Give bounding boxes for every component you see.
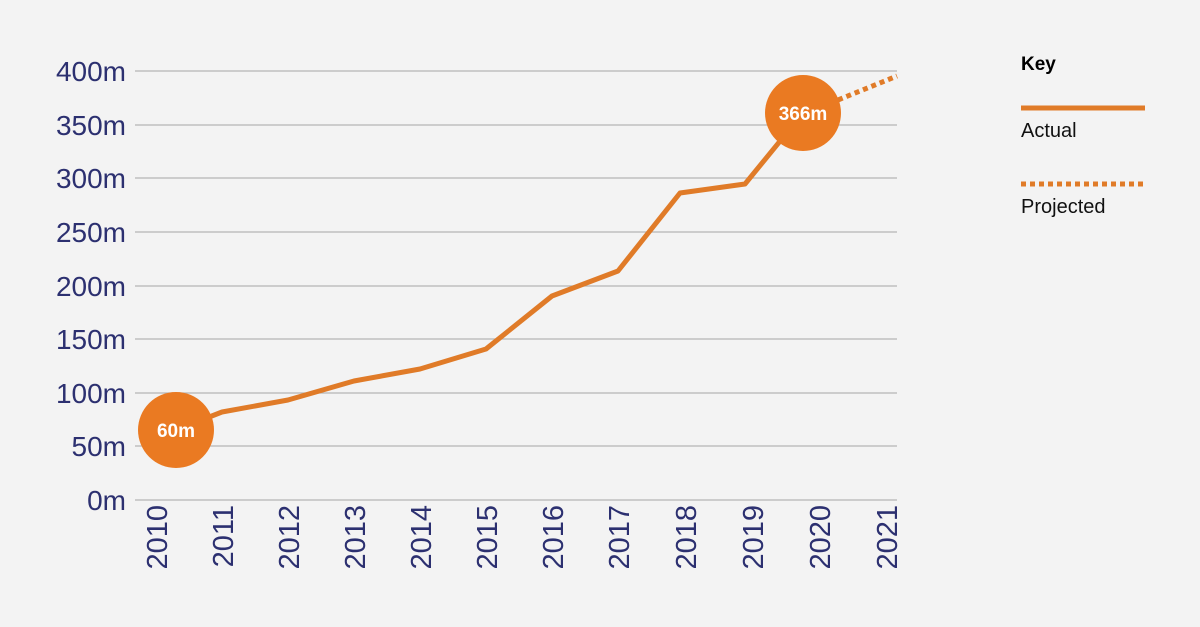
- x-axis labels: 2021: [872, 505, 904, 570]
- callout: 60m: [138, 392, 214, 468]
- y-axis labels: 200m: [56, 271, 126, 302]
- key: Projected: [1021, 196, 1106, 218]
- y-axis labels: 50m: [72, 431, 126, 462]
- y-axis labels: 300m: [56, 163, 126, 194]
- y-axis labels: 150m: [56, 324, 126, 355]
- y-axis labels: [56, 56, 126, 516]
- callout: 366m: [765, 75, 841, 151]
- x-axis labels: 2013: [340, 505, 372, 570]
- y-axis labels: 0m: [87, 485, 126, 516]
- actual line: [176, 113, 803, 430]
- callout: 60m: 60m: [157, 421, 195, 442]
- y-axis labels: 250m: [56, 217, 126, 248]
- x-axis labels: [142, 505, 904, 570]
- key: Actual: [1021, 120, 1077, 142]
- key: [1021, 54, 1145, 218]
- x-axis labels: 2012: [274, 505, 306, 570]
- x-axis labels: 2016: [538, 505, 570, 570]
- y-axis labels: 400m: [56, 56, 126, 87]
- x-axis labels: 2014: [406, 505, 438, 570]
- x-axis labels: 2017: [604, 505, 636, 570]
- y-axis labels: 350m: [56, 110, 126, 141]
- y-axis labels: 100m: [56, 378, 126, 409]
- x-axis labels: 2015: [472, 505, 504, 570]
- key: Key: [1021, 54, 1056, 75]
- x-axis labels: 2019: [738, 505, 770, 570]
- x-axis labels: 2020: [805, 505, 837, 570]
- projected line: [838, 76, 897, 100]
- x-axis labels: 2011: [208, 505, 240, 567]
- x-axis labels: 2010: [142, 505, 174, 570]
- x-axis labels: 2018: [671, 505, 703, 570]
- callout: 366m: 366m: [779, 104, 827, 125]
